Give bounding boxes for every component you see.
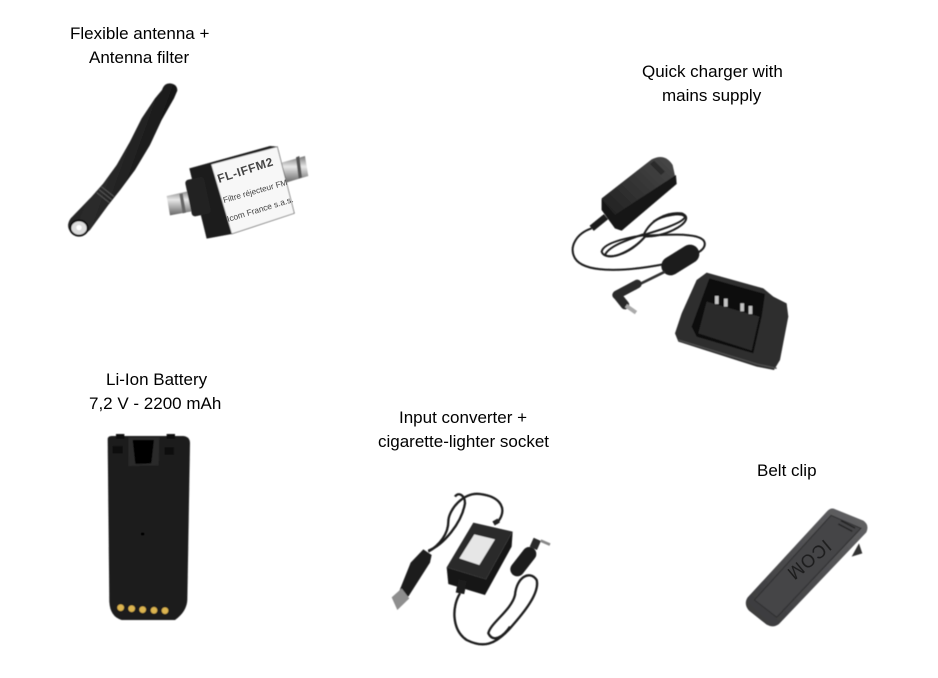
filter label text: Icom France s.a.s.: [226, 194, 294, 224]
heading: input converter: Input converter +: [399, 408, 527, 427]
heading: flexible antenna and filter: Flexible antenna +: [70, 24, 209, 43]
heading: input converter: [378, 408, 549, 451]
clip logo: ICOM: [783, 536, 835, 584]
heading: battery: Li-Ion Battery: [106, 370, 208, 389]
heading: battery: 7,2 V - 2200 mAh: [89, 394, 221, 413]
filter label text: Filtre réjecteur FM: [222, 178, 289, 205]
heading: input converter: cigarette-lighter socket: [378, 432, 549, 451]
icon: mains adapter and cable: [573, 157, 705, 313]
icon: Li-Ion battery: [108, 434, 190, 620]
heading: battery: [89, 370, 221, 413]
filter label text: [216, 155, 294, 224]
icon: input converter with cigarette-lighter plug: [392, 494, 550, 644]
icon: charging cradle: [675, 273, 788, 370]
heading: flexible antenna and filter: [70, 24, 209, 67]
icon: flexible antenna: [68, 83, 177, 236]
icon: FL-IFFM2 antenna filter: [167, 146, 308, 239]
heading: flexible antenna and filter: Antenna filter: [89, 48, 190, 67]
filter label text: FL-IFFM2: [216, 155, 275, 186]
heading: quick charger: Quick charger with: [642, 62, 783, 81]
heading: quick charger: [642, 62, 783, 105]
icon: belt clip: [746, 508, 867, 626]
heading: belt clip: Belt clip: [757, 461, 817, 480]
heading: quick charger: mains supply: [662, 86, 762, 105]
